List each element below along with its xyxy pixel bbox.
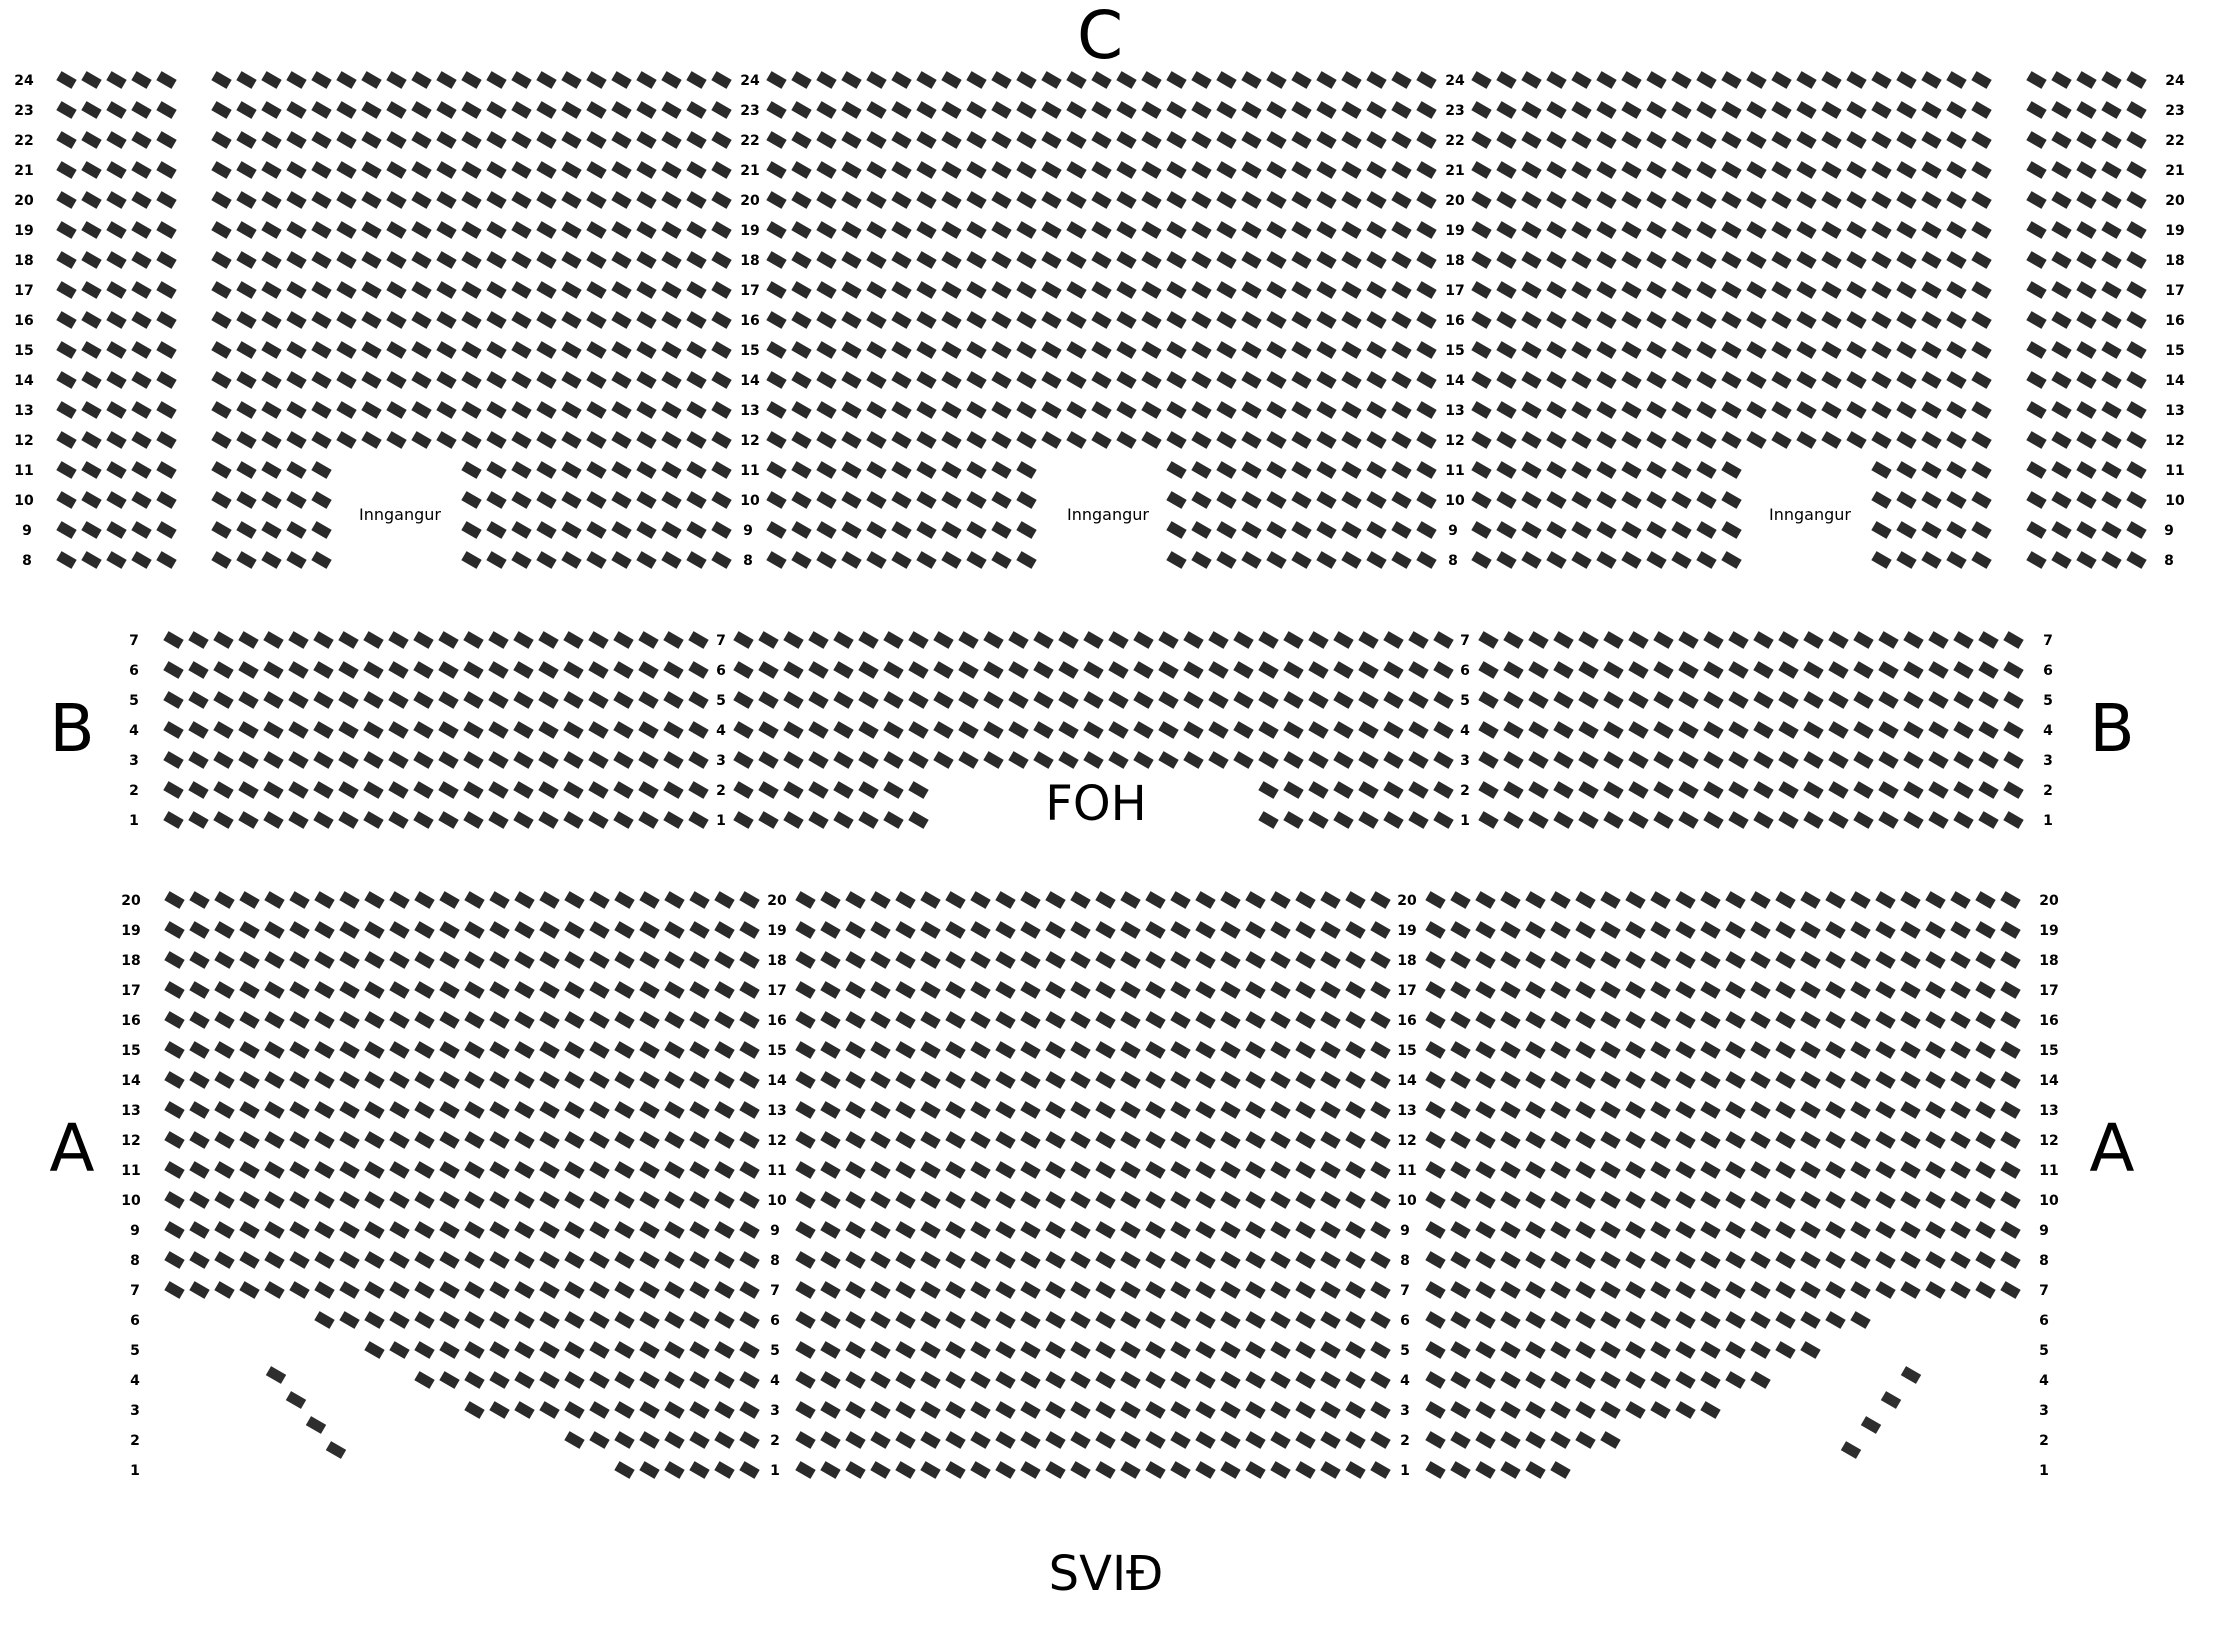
section C row numbers: 13 [14,403,34,419]
section B row numbers: 4 [129,723,139,739]
section B row numbers: 5 [1460,693,1470,709]
section A row numbers: 3 [2039,1403,2049,1419]
section C row numbers: 10 [740,493,760,509]
section C row numbers: 23 [1445,103,1465,119]
section A row numbers: 3 [1400,1403,1410,1419]
section A row numbers: 11 [2039,1163,2059,1179]
section B row numbers: 7 [2043,633,2053,649]
section A row numbers: 3 [770,1403,780,1419]
section C row numbers: 9 [1448,523,1458,539]
section C row numbers: 10 [2165,493,2185,509]
section label A right: A [2089,1110,2135,1187]
section C row numbers: 11 [14,463,34,479]
section A row numbers: 7 [2039,1283,2049,1299]
section B row numbers: 5 [2043,693,2053,709]
section C row numbers: 12 [14,433,34,449]
section C row numbers: 19 [740,223,760,239]
section B row numbers: 3 [716,753,726,769]
section C row numbers: 15 [14,343,34,359]
section label B right: B [2089,690,2135,767]
section A row numbers: 5 [770,1343,780,1359]
section B row numbers: 1 [1460,813,1470,829]
section A row numbers: 13 [1397,1103,1417,1119]
section C row numbers: 13 [740,403,760,419]
section A row numbers: 6 [770,1313,780,1329]
section A row numbers: 11 [767,1163,787,1179]
section A row numbers: 14 [2039,1073,2059,1089]
section B row numbers: 2 [2043,783,2053,799]
section A row numbers: 15 [1397,1043,1417,1059]
section C row numbers: 18 [740,253,760,269]
section A row numbers: 9 [2039,1223,2049,1239]
section A row numbers: 5 [2039,1343,2049,1359]
entrance label 1: Inngangur [359,505,441,524]
section A row numbers: 8 [130,1253,140,1269]
section C row numbers: 8 [22,553,32,569]
section C row numbers: 17 [740,283,760,299]
section A row numbers: 8 [2039,1253,2049,1269]
section A row numbers: 1 [770,1463,780,1479]
section C row numbers: 24 [740,73,760,89]
section A row numbers: 17 [121,983,141,999]
section A row numbers: 20 [1397,893,1417,909]
section B row numbers: 3 [129,753,139,769]
section A row numbers: 16 [767,1013,787,1029]
section A row numbers: 1 [130,1463,140,1479]
section C row numbers: 22 [740,133,760,149]
section A row numbers: 4 [770,1373,780,1389]
section C row numbers: 10 [14,493,34,509]
section C row numbers: 21 [14,163,34,179]
section C row numbers: 14 [14,373,34,389]
section C row numbers: 23 [2165,103,2185,119]
section A row numbers: 7 [770,1283,780,1299]
section C row numbers: 20 [1445,193,1465,209]
section A row numbers: 12 [2039,1133,2059,1149]
section B row numbers: 1 [716,813,726,829]
section B row numbers: 1 [2043,813,2053,829]
entrance label 3: Inngangur [1769,505,1851,524]
section A row numbers: 16 [1397,1013,1417,1029]
section C row numbers: 22 [1445,133,1465,149]
section A row numbers: 18 [2039,953,2059,969]
section C row numbers: 21 [2165,163,2185,179]
section A row numbers: 16 [121,1013,141,1029]
section A row numbers: 15 [2039,1043,2059,1059]
section A row numbers: 20 [121,893,141,909]
section C row numbers: 12 [1445,433,1465,449]
section B row numbers: 7 [1460,633,1470,649]
section A row numbers: 16 [2039,1013,2059,1029]
section B row numbers [129,633,2053,829]
section B row numbers: 7 [129,633,139,649]
section A row numbers: 5 [130,1343,140,1359]
section A row numbers: 17 [767,983,787,999]
section B row numbers: 6 [2043,663,2053,679]
section B row numbers: 1 [129,813,139,829]
section A row numbers: 7 [130,1283,140,1299]
section C seats [54,65,2149,575]
section C row numbers: 24 [1445,73,1465,89]
section A row numbers: 6 [130,1313,140,1329]
section A row numbers: 2 [130,1433,140,1449]
section C row numbers: 11 [2165,463,2185,479]
section C row numbers: 8 [743,553,753,569]
section A row numbers: 13 [767,1103,787,1119]
section B row numbers: 2 [1460,783,1470,799]
section C row numbers: 21 [1445,163,1465,179]
section C row numbers: 19 [1445,223,1465,239]
section B row numbers: 6 [129,663,139,679]
section C row numbers: 23 [14,103,34,119]
FOH label: FOH [1045,776,1147,832]
section A row numbers: 4 [130,1373,140,1389]
section C row numbers: 16 [2165,313,2185,329]
section B row numbers: 6 [716,663,726,679]
section C row numbers: 23 [740,103,760,119]
section C row numbers: 15 [1445,343,1465,359]
section C row numbers: 12 [2165,433,2185,449]
section B row numbers: 4 [1460,723,1470,739]
section C row numbers: 14 [2165,373,2185,389]
section A row numbers: 8 [1400,1253,1410,1269]
section C row numbers: 22 [14,133,34,149]
section A row numbers: 9 [770,1223,780,1239]
section A seats [162,885,2023,1485]
section C row numbers: 9 [743,523,753,539]
section A row numbers: 6 [1400,1313,1410,1329]
section A row numbers: 13 [121,1103,141,1119]
section A row numbers: 7 [1400,1283,1410,1299]
section A row numbers: 17 [2039,983,2059,999]
section A row numbers: 10 [2039,1193,2059,1209]
section A row numbers: 19 [1397,923,1417,939]
section C row numbers: 15 [2165,343,2185,359]
section A row numbers: 18 [1397,953,1417,969]
section C row numbers: 21 [740,163,760,179]
section A row numbers: 13 [2039,1103,2059,1119]
diagonal seats left [266,1366,346,1459]
section C row numbers: 17 [1445,283,1465,299]
section A row numbers: 14 [121,1073,141,1089]
section A row numbers: 12 [1397,1133,1417,1149]
section B row numbers: 5 [716,693,726,709]
section C row numbers: 18 [1445,253,1465,269]
section A row numbers: 18 [121,953,141,969]
section C row numbers: 8 [1448,553,1458,569]
entrance label 2: Inngangur [1067,505,1149,524]
section C row numbers: 12 [740,433,760,449]
section A row numbers: 3 [130,1403,140,1419]
section C row numbers: 16 [740,313,760,329]
section C row numbers: 20 [14,193,34,209]
section B row numbers: 4 [2043,723,2053,739]
section C row numbers: 10 [1445,493,1465,509]
section A row numbers: 14 [1397,1073,1417,1089]
section A row numbers: 8 [770,1253,780,1269]
section A row numbers [121,893,2059,1479]
section B row numbers: 3 [2043,753,2053,769]
section A row numbers: 5 [1400,1343,1410,1359]
section A row numbers: 10 [767,1193,787,1209]
section C row numbers: 24 [2165,73,2185,89]
section A row numbers: 12 [121,1133,141,1149]
section A row numbers: 1 [2039,1463,2049,1479]
section A row numbers: 4 [1400,1373,1410,1389]
section A row numbers: 15 [767,1043,787,1059]
section C row numbers: 14 [1445,373,1465,389]
section C row numbers: 16 [14,313,34,329]
section A row numbers: 17 [1397,983,1417,999]
section A row numbers: 10 [1397,1193,1417,1209]
section A row numbers: 2 [1400,1433,1410,1449]
section C row numbers: 18 [14,253,34,269]
section A row numbers: 2 [770,1433,780,1449]
section A row numbers: 19 [121,923,141,939]
section C row numbers: 16 [1445,313,1465,329]
section C row numbers: 15 [740,343,760,359]
section A row numbers: 10 [121,1193,141,1209]
section B row numbers: 2 [716,783,726,799]
section A row numbers: 1 [1400,1463,1410,1479]
section C row numbers: 18 [2165,253,2185,269]
section B row numbers: 4 [716,723,726,739]
section C row numbers: 13 [2165,403,2185,419]
section C row numbers: 9 [2164,523,2174,539]
section A row numbers: 11 [1397,1163,1417,1179]
section C row numbers: 17 [2165,283,2185,299]
section label A left: A [49,1110,95,1187]
section A row numbers: 9 [130,1223,140,1239]
section C row numbers: 13 [1445,403,1465,419]
section C row numbers: 20 [740,193,760,209]
section C row numbers: 9 [22,523,32,539]
section A row numbers: 9 [1400,1223,1410,1239]
section A row numbers: 20 [2039,893,2059,909]
section C row numbers: 11 [740,463,760,479]
section B row numbers: 5 [129,693,139,709]
section C row numbers [14,73,2185,569]
section B row numbers: 7 [716,633,726,649]
section label B left: B [49,690,95,767]
diagonal seats right [1841,1366,1921,1459]
section A row numbers: 15 [121,1043,141,1059]
section A row numbers: 18 [767,953,787,969]
section A row numbers: 11 [121,1163,141,1179]
section C row numbers: 20 [2165,193,2185,209]
section B row numbers: 2 [129,783,139,799]
section A row numbers: 14 [767,1073,787,1089]
section A row numbers: 2 [2039,1433,2049,1449]
section C row numbers: 11 [1445,463,1465,479]
section A row numbers: 19 [2039,923,2059,939]
section A row numbers: 6 [2039,1313,2049,1329]
stage label: SVIÐ [1049,1546,1163,1602]
section C row numbers: 19 [14,223,34,239]
section A row numbers: 12 [767,1133,787,1149]
section B seats [161,625,2026,835]
section A row numbers: 4 [2039,1373,2049,1389]
section A row numbers: 20 [767,893,787,909]
section C row numbers: 19 [2165,223,2185,239]
section A row numbers: 19 [767,923,787,939]
section C row numbers: 24 [14,73,34,89]
section C row numbers: 17 [14,283,34,299]
section B row numbers: 6 [1460,663,1470,679]
section C row numbers: 14 [740,373,760,389]
section C row numbers: 22 [2165,133,2185,149]
section C row numbers: 8 [2164,553,2174,569]
section B row numbers: 3 [1460,753,1470,769]
